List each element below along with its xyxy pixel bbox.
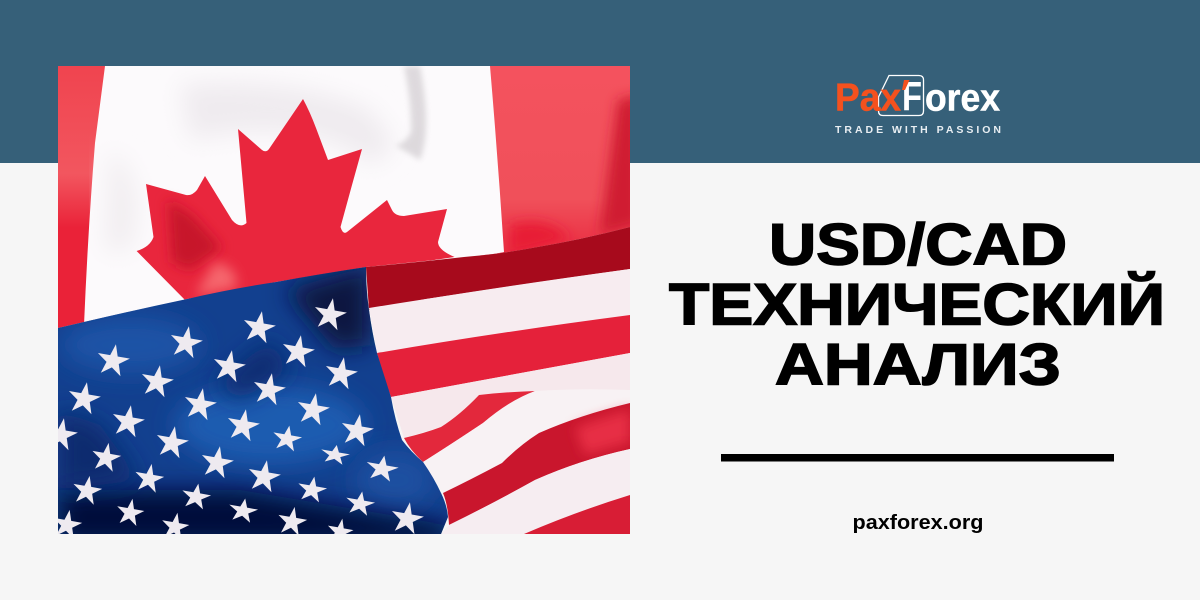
website url: paxforex.org [852,512,984,534]
tagline: TRADE WITH PASSION [835,124,1001,136]
logo frame [878,76,924,116]
title [669,212,1165,397]
logo slash [902,80,910,90]
title line 1: USD/CAD [769,212,1067,277]
US stripes [366,227,630,534]
divider line [721,454,1114,462]
maple leaf [137,99,455,302]
logo [835,74,1001,136]
logo F: F [902,74,922,120]
title line 3: АНАЛИЗ [775,332,1061,397]
logo wordmark: Pax [835,76,901,120]
title line 2: ТЕХНИЧЕСКИЙ [669,272,1165,337]
blue canton [58,267,448,534]
photo: Canadian and US flags [43,66,640,545]
logo orex: orex [925,78,1000,120]
Canadian flag [58,66,640,336]
stars [43,295,426,545]
header band [0,0,1200,163]
red wedge stripe [404,391,535,462]
